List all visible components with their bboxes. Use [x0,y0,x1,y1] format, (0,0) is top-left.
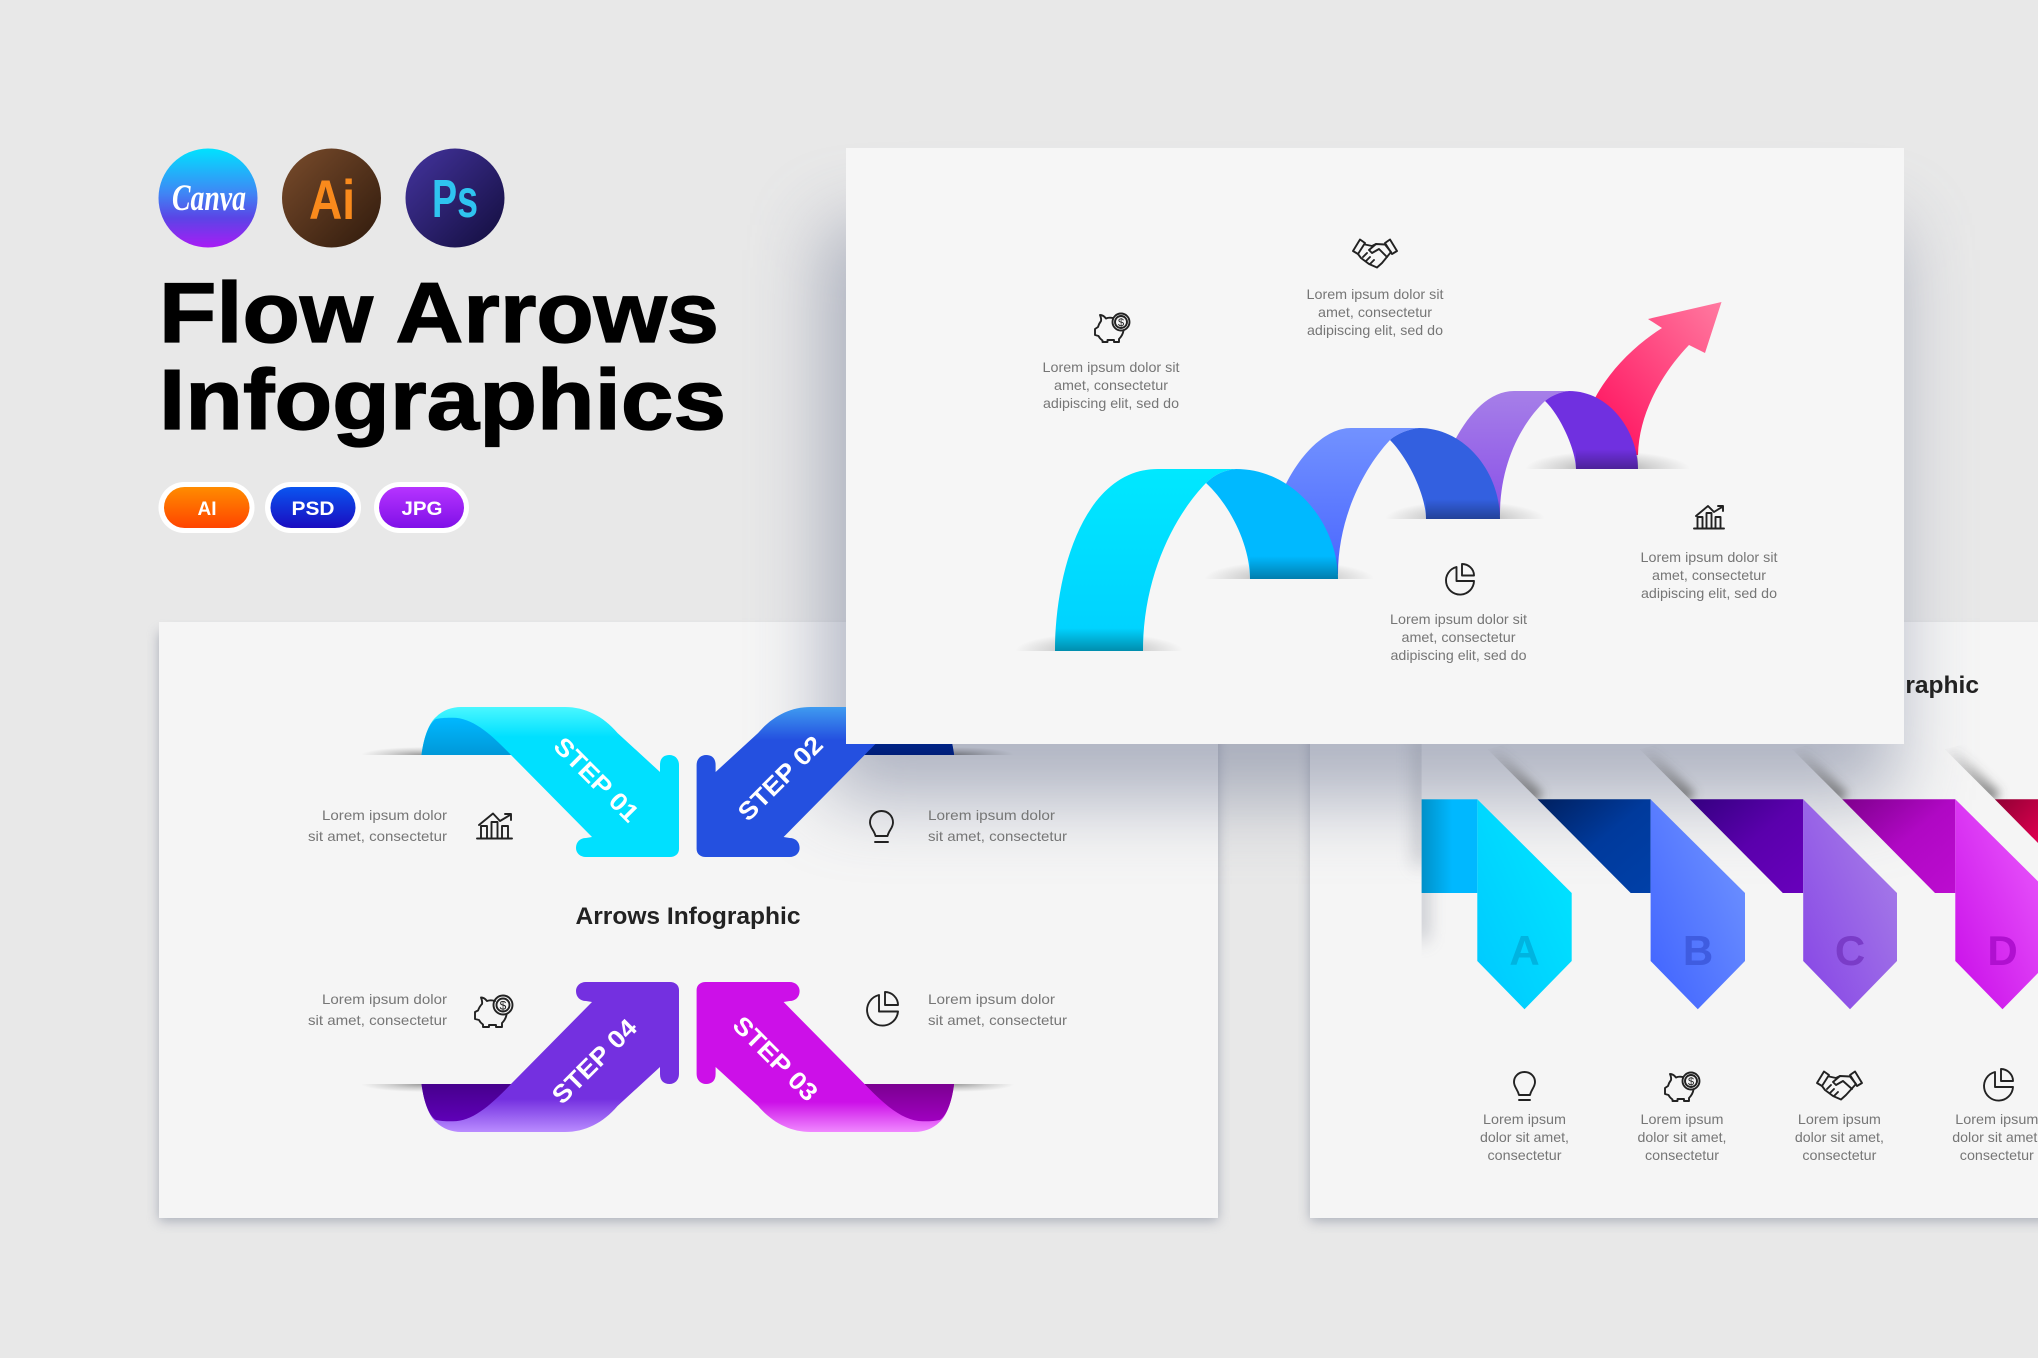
icon: pie chart (step 03) [867,992,898,1026]
text block: step 02: sit amet, consectetur [928,828,1067,844]
tag B [1651,799,1745,1009]
text block: tag B: Lorem ipsum [1640,1111,1724,1127]
tag A [1477,799,1572,1009]
arrow: step 04 [361,982,679,1132]
text block: tag D: consectetur [1960,1147,2034,1163]
pill: JPG [374,482,469,533]
band: tag E back [1995,799,2038,843]
icon: chart (step 01) [477,814,512,838]
tag D: D [1987,927,2018,974]
tag C: C [1835,927,1865,974]
panel: front card with stair arrow [846,148,1904,744]
band: tag A back [1422,799,1477,893]
text block: step 03: sit amet, consectetur [928,1012,1067,1028]
icon: Photoshop badge [406,148,504,248]
text block: step 04: sit amet, consectetur [308,1012,447,1028]
pill: PSD [265,482,361,533]
text block: tag C [1795,1111,1884,1163]
pill: PSD: PSD [292,499,334,520]
band: tag D back [1842,799,1955,893]
text block: tag C: consectetur [1802,1147,1877,1163]
text block: chart: Lorem ipsum dolor sit [1640,549,1778,565]
text block: tag D: dolor sit amet, [1952,1129,2038,1145]
text block: tag B: dolor sit amet, [1638,1129,1726,1145]
text block: tag A: consectetur [1488,1147,1562,1163]
text block: step 01 [308,807,447,844]
panel: labelled tags card [1310,622,2038,1218]
text block: pie: Lorem ipsum dolor sit [1390,611,1527,627]
text block: pie: amet, consectetur [1402,629,1516,645]
arrow: step 02 [697,707,1015,857]
format pills [158,482,469,533]
arrow: step 01 [361,707,679,857]
icon: bulb (step 02) [870,811,893,842]
icon: pie chart (top card) [1446,564,1474,595]
text block: chart: adipiscing elit, sed do [1641,585,1777,601]
arrow head: red [1595,302,1722,455]
text block: step 04 [308,991,447,1028]
text block: piggy: Lorem ipsum dolor sit [1042,359,1180,375]
band: tag C back [1690,799,1803,893]
text block: pie: adipiscing elit, sed do [1390,647,1527,663]
text block: handshake [1306,286,1444,338]
text block: tag D: Lorem ipsum [1955,1111,2038,1127]
chart: stair arches arrow [1015,302,1722,669]
tag B: B [1683,927,1713,974]
arch: blue [1285,428,1500,574]
text block: step 02: Lorem ipsum dolor [928,807,1055,823]
text block: chart [1640,549,1778,601]
heading: Arrows Infographic (left card): Arrows Infographic [576,903,800,930]
app icons row [158,148,504,248]
text block: tag B [1638,1111,1726,1163]
icon: handshake (top card) [1353,240,1397,268]
pill: AI [158,482,254,533]
icon: Canva badge: Canva [172,178,246,219]
icon: piggy bank (step 04): $ [500,998,507,1012]
text block: handshake: amet, consectetur [1318,304,1432,320]
title: Flow Arrows [159,266,719,361]
icon: pie chart (tag D) [1984,1069,2013,1101]
text block: step 04: Lorem ipsum dolor [322,991,447,1007]
fold shadows [1416,735,1995,940]
arrow: step 04: STEP 04 [547,1014,643,1110]
icon: Illustrator badge [282,148,381,248]
band: tag B back [1538,799,1651,893]
arch: purple [1455,391,1638,515]
icon: chart (top card) [1694,506,1724,528]
arrow: step 03: STEP 03 [727,1011,823,1107]
text block: tag C: Lorem ipsum [1798,1111,1881,1127]
floor shadows [1015,451,1690,669]
icon: Photoshop badge: Ps [432,169,478,229]
text block: tag A [1480,1111,1569,1163]
arrow: step 03 [697,982,1015,1132]
tag A: A [1509,927,1540,974]
icon: piggy bank (tag B): $ [1688,1076,1694,1088]
icon: piggy bank (step 04) [475,996,512,1027]
icon: piggy bank (top card) [1095,314,1130,342]
tag D [1955,799,2038,1009]
text block: handshake: adipiscing elit, sed do [1307,322,1443,338]
icon: bulb (tag A) [1514,1072,1535,1100]
text block: step 02 [928,807,1067,844]
arrow: step 02: STEP 02 [733,731,829,827]
text block: step 01: sit amet, consectetur [308,828,447,844]
pill: JPG: JPG [402,499,442,520]
text block: tag B: consectetur [1645,1147,1719,1163]
icon: Illustrator badge: Ai [309,168,355,231]
icon: Canva badge [158,148,258,248]
text block: tag D [1952,1111,2038,1163]
text block: handshake: Lorem ipsum dolor sit [1306,286,1444,302]
arch: cyan [1055,469,1338,651]
title: Infographics [159,353,726,448]
title [159,266,726,448]
text block: pie [1390,611,1527,663]
text block: piggy: amet, consectetur [1054,377,1168,393]
text block: step 01: Lorem ipsum dolor [322,807,447,823]
text block: tag A: Lorem ipsum [1483,1111,1566,1127]
text block: tag A: dolor sit amet, [1480,1129,1569,1145]
text block: step 03 [928,991,1067,1028]
text block: chart: amet, consectetur [1652,567,1766,583]
icon: handshake (tag C) [1817,1072,1862,1100]
heading: Arrows Infographic (right card): Arrows Infographic [1754,672,1979,699]
panel shadows [159,632,2038,1221]
shadow cast by front card [826,225,1896,800]
pill: AI: AI [198,499,216,520]
tag C [1803,799,1897,1009]
icon: piggy bank (top card): $ [1118,317,1124,329]
panel: step arrows card [159,622,1218,1218]
text block: step 03: Lorem ipsum dolor [928,991,1055,1007]
text block: piggy [1042,359,1180,411]
text block: tag C: dolor sit amet, [1795,1129,1884,1145]
text block: piggy: adipiscing elit, sed do [1043,395,1179,411]
icon: piggy bank (tag B) [1665,1072,1700,1101]
arrow: step 01: STEP 01 [548,732,644,828]
